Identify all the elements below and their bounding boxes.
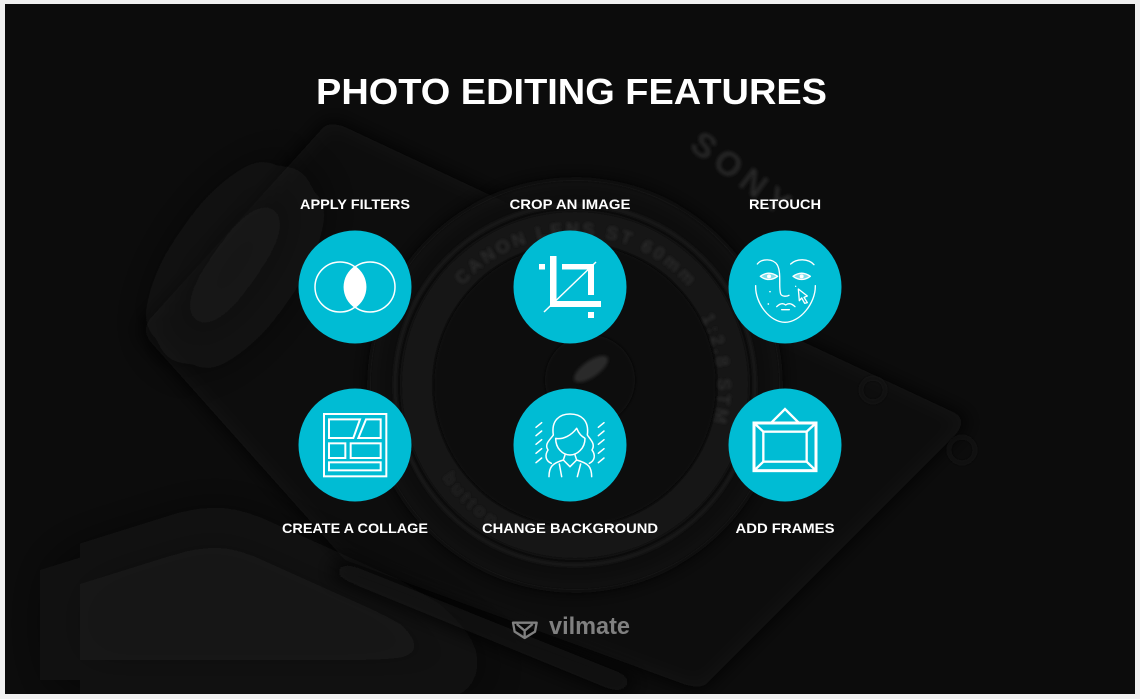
logo: vilmate <box>513 613 630 640</box>
lens barrel <box>370 180 780 590</box>
label: change background: CHANGE BACKGROUND <box>482 520 658 536</box>
icon: face with cursor <box>728 230 842 344</box>
label: add frames: ADD FRAMES <box>736 520 834 536</box>
lens lettering <box>450 223 730 502</box>
label: retouch: RETOUCH <box>749 196 821 212</box>
feature: add frames <box>728 388 842 536</box>
icon: overlapping circles <box>298 230 412 344</box>
feature: retouch <box>728 196 842 344</box>
camera body <box>140 120 970 690</box>
feature: change background <box>482 388 658 536</box>
aperture ring <box>545 335 635 425</box>
feature: create a collage <box>282 388 428 536</box>
lens text band <box>417 227 733 543</box>
dark lower camera edge <box>330 560 640 694</box>
camera dial marks <box>861 378 975 463</box>
lens highlight <box>573 355 609 383</box>
icon: logo shield <box>513 623 537 638</box>
icon: crop tool <box>514 230 626 344</box>
icon: picture frame <box>728 388 842 502</box>
label: apply filters: APPLY FILTERS <box>300 196 410 212</box>
hand in the foreground <box>80 548 414 660</box>
lens dark centre <box>434 244 716 526</box>
label: create a collage: CREATE A COLLAGE <box>282 520 428 536</box>
camera grip <box>190 208 280 322</box>
camera brand lettering: SONY <box>683 124 802 227</box>
lens lettering: button <box>450 474 474 502</box>
lens outer rings <box>492 194 500 197</box>
lens lettering: CANON LENS ST 60mm <box>456 223 693 284</box>
feature: apply filters <box>298 196 412 344</box>
title: PHOTO EDITING FEATURES <box>316 71 827 112</box>
label: crop an image: CROP AN IMAGE <box>510 196 630 212</box>
icon: woman portrait <box>514 388 626 502</box>
icon: collage layout <box>298 388 412 502</box>
wordmark: vilmate <box>549 613 630 640</box>
feature: crop an image <box>510 196 630 344</box>
lens lettering: 1:2.8 STM <box>702 314 730 423</box>
